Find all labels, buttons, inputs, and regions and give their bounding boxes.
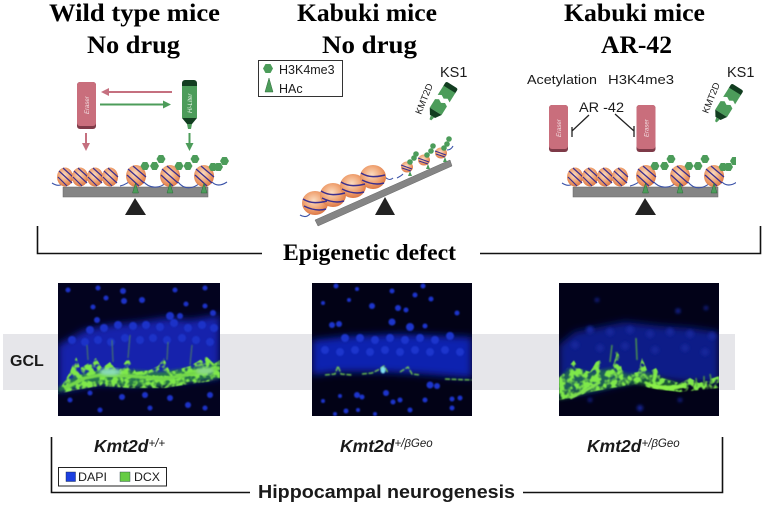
label: H3K4me3: H3K4me3 bbox=[608, 73, 674, 87]
label: GCL: GCL bbox=[10, 353, 44, 370]
bracket: hippocampal neurogenesis bbox=[52, 437, 722, 492]
title: Wild type mice, No drug: No drug bbox=[87, 30, 180, 59]
title: Wild type mice, No drug bbox=[49, 0, 220, 59]
legend: marks bbox=[258, 60, 342, 96]
micrograph: wild type bbox=[58, 283, 220, 416]
title: Kabuki mice, No drug: No drug bbox=[322, 30, 417, 59]
balance: tilted beam bbox=[300, 136, 453, 226]
band: GCL bbox=[3, 334, 735, 390]
icon: highlighter bbox=[182, 80, 197, 129]
inhibition arrow: left bbox=[572, 115, 589, 137]
legend: marks: H3K4me3 bbox=[279, 63, 335, 77]
panel: Kabuki no drug schematic bbox=[258, 60, 467, 226]
icon: broken highlighter bbox=[710, 83, 744, 126]
icon: eraser, H3K4me3: Eraser bbox=[644, 118, 650, 137]
genotype label: wild type: Kmt2d bbox=[94, 436, 148, 456]
micrograph: Kabuki AR-42 bbox=[559, 283, 719, 416]
bracket: epigenetic defect bbox=[38, 226, 760, 254]
label: Acetylation: Acetylation bbox=[527, 73, 597, 87]
label: AR -42: AR -42 bbox=[579, 99, 624, 115]
label: KS1: KS1 bbox=[440, 65, 467, 81]
icon: eraser: Eraser bbox=[85, 95, 91, 114]
genotype label: wild type: +/+ bbox=[148, 438, 165, 450]
genotype label: Kabuki no drug: +/βGeo bbox=[394, 438, 433, 450]
legend: DAPI and DCX bbox=[58, 468, 166, 486]
arrow: pink, highlighter to eraser bbox=[101, 88, 172, 96]
icon: eraser, acetylation: Eraser bbox=[557, 118, 563, 137]
legend: DAPI and DCX: DAPI bbox=[78, 472, 107, 484]
arrow: green, eraser to highlighter bbox=[100, 100, 171, 108]
balance: nucleosomes on level beam bbox=[52, 155, 229, 215]
icon: highlighter: Hi-Liter bbox=[188, 93, 194, 113]
legend: DAPI and DCX: DCX bbox=[134, 472, 160, 484]
panel: Kabuki AR-42 schematic bbox=[527, 65, 754, 215]
genotype label: Kabuki AR-42: Kmt2d bbox=[587, 436, 641, 456]
label: KMT2D: KMT2D bbox=[414, 82, 436, 116]
title: Kabuki mice, AR-42 bbox=[564, 0, 705, 59]
genotype label: Kabuki no drug: Kmt2d bbox=[340, 436, 394, 456]
arrow: pink, down bbox=[82, 133, 90, 151]
genotype label: Kabuki AR-42: +/βGeo bbox=[641, 438, 680, 450]
panel: wild type schematic bbox=[52, 80, 229, 215]
micrograph: Kabuki no drug bbox=[312, 283, 472, 416]
label: KMT2D: KMT2D bbox=[701, 81, 723, 115]
arrow: green, down bbox=[186, 133, 194, 151]
icon: eraser bbox=[77, 82, 96, 129]
inhibition arrow: right bbox=[615, 114, 634, 137]
balance: nucleosomes on level beam bbox=[562, 155, 739, 215]
legend: marks: HAc bbox=[279, 82, 303, 96]
heading: Hippocampal neurogenesis: Hippocampal neurogenesis bbox=[258, 482, 515, 502]
icon: eraser, H3K4me3 bbox=[636, 105, 656, 152]
icon: eraser, acetylation bbox=[549, 105, 568, 152]
icon: broken highlighter bbox=[424, 81, 458, 124]
title: Kabuki mice, AR-42: AR-42 bbox=[601, 30, 672, 59]
title: Kabuki mice, No drug bbox=[297, 0, 437, 59]
label: KS1: KS1 bbox=[727, 65, 754, 81]
heading: Epigenetic defect: Epigenetic defect bbox=[283, 240, 456, 265]
